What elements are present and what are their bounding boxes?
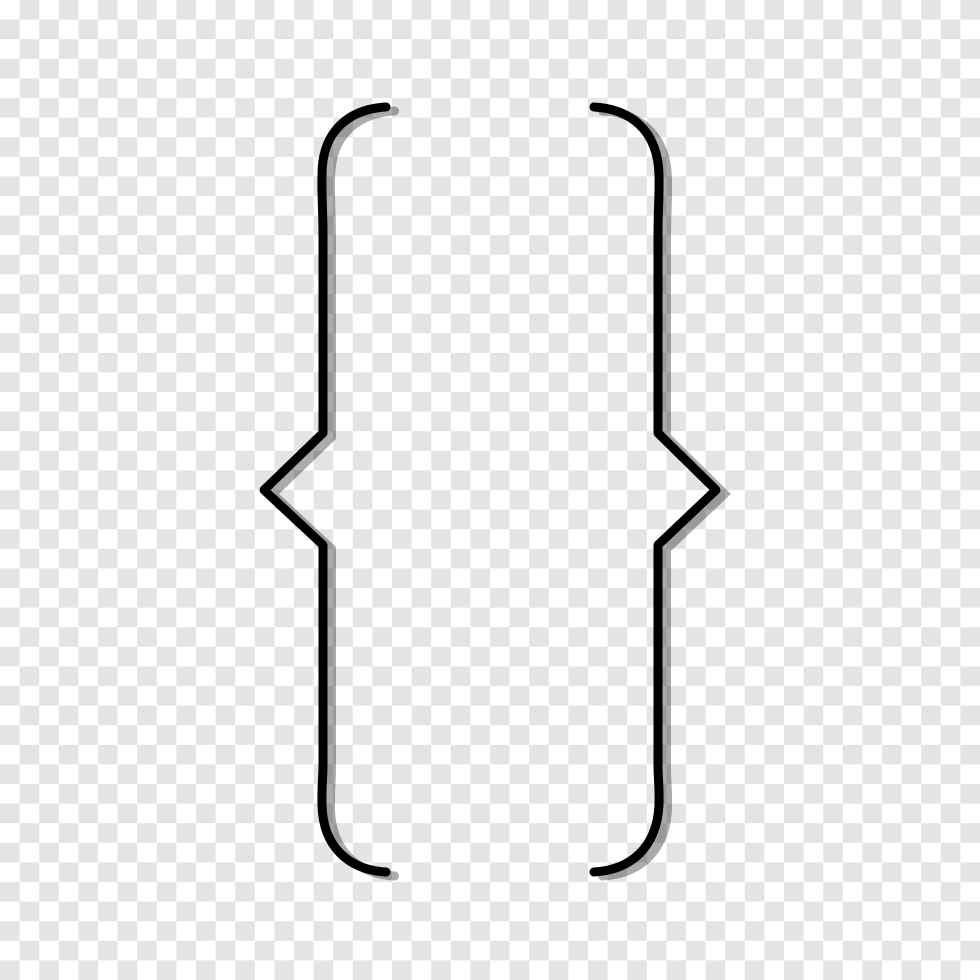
- left bracket shadow: [272, 111, 394, 876]
- right bracket shadow: [602, 111, 724, 876]
- right curly bracket: [594, 107, 716, 872]
- left curly bracket: [264, 107, 386, 872]
